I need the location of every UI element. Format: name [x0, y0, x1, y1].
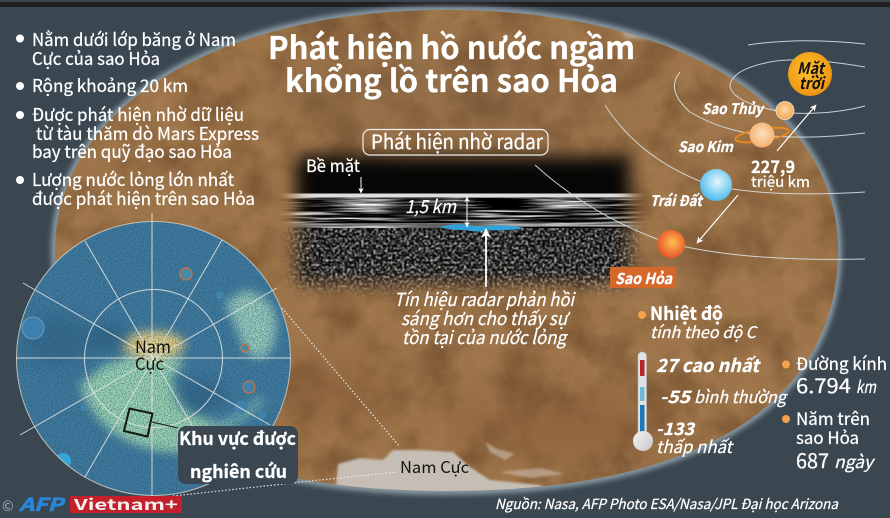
- year length stat: sao Hỏa: [796, 424, 859, 449]
- green ice region: [80, 290, 276, 452]
- title: [268, 23, 635, 101]
- temperature values: thấp nhất: [656, 433, 735, 458]
- temperature values: -55: [660, 383, 692, 408]
- key facts list: Lượng nước lỏng lớn nhất: [32, 167, 234, 192]
- pole label: Nam: [135, 333, 171, 358]
- sun: trời: [799, 70, 826, 94]
- radar image panel: [282, 142, 644, 298]
- planet Earth: Trái Đất: [650, 190, 704, 211]
- dotted zoom lines: [173, 308, 400, 496]
- orbit lines: [535, 41, 865, 259]
- map grid: [16, 213, 291, 505]
- distance label: 227,9: [751, 153, 795, 178]
- year length stat: Năm trên: [796, 405, 870, 430]
- key facts list: từ tàu thăm dò Mars Express: [36, 121, 259, 146]
- temperature values: 27 cao nhất: [656, 352, 761, 378]
- year length stat: [782, 405, 875, 474]
- planet Venus: Sao Kim: [678, 136, 734, 157]
- temperature heading: tính theo độ C: [650, 319, 758, 343]
- south polar ice cap: [335, 448, 544, 491]
- diameter stat: [782, 350, 887, 399]
- callout: study area: nghiên cứu: [190, 458, 287, 484]
- logos: ©: [2, 496, 14, 516]
- key facts list: Cực của sao Hỏa: [32, 46, 160, 71]
- yellow centre: [121, 331, 185, 359]
- year length stat: ngày: [834, 448, 875, 473]
- temperature values: bình thường: [694, 384, 789, 408]
- temperature heading: [638, 300, 758, 343]
- planet Mercury: Sao Thủy: [702, 98, 765, 119]
- key facts list: được phát hiện trên sao Hỏa: [32, 186, 255, 211]
- distance label: [751, 153, 810, 192]
- diameter stat: Đường kính: [796, 350, 887, 375]
- key facts list: Rộng khoảng 20 km: [32, 73, 188, 98]
- key facts list: [16, 27, 259, 211]
- Mars label: Sao Hỏa: [615, 268, 673, 289]
- year length stat: 687: [796, 445, 829, 474]
- logos: AFP: [18, 491, 67, 517]
- planet Mars marker: [657, 230, 685, 258]
- callout: study area: Khu vực được: [179, 425, 296, 451]
- icon: thermometer: [633, 352, 653, 451]
- radar caption: tồn tại của nước lỏng: [402, 324, 569, 350]
- key facts list: Được phát hiện nhờ dữ liệu: [32, 102, 244, 127]
- planet Earth: [650, 169, 732, 211]
- planet Mercury: [702, 98, 794, 120]
- radar caption: sáng hơn cho thấy sự: [401, 305, 571, 331]
- key facts list: bay trên quỹ đạo sao Hỏa: [32, 139, 232, 164]
- top dark strip: [0, 2, 890, 7]
- temperature heading: Nhiệt độ: [650, 300, 723, 326]
- title: Phát hiện hồ nước ngầm: [268, 23, 635, 68]
- south pole map disc: Cực: [135, 350, 164, 375]
- planet Venus: [678, 122, 790, 157]
- radar caption: [394, 286, 576, 350]
- arrow: depth: [466, 197, 468, 227]
- key facts list: Nằm dưới lớp băng ở Nam: [32, 27, 236, 52]
- south pole map disc: [16, 213, 292, 505]
- water lake on radar: [440, 224, 525, 232]
- arrow: Mars to Sun distance: [777, 105, 816, 151]
- radar title box: Phát hiện nhờ radar: [371, 126, 543, 155]
- south pole label on globe: Nam Cực: [400, 454, 469, 478]
- depth label: 1,5 km: [405, 193, 457, 219]
- title: khổng lồ trên sao Hỏa: [285, 56, 618, 101]
- diameter stat: km: [856, 373, 877, 398]
- craters: [22, 317, 44, 339]
- arrow: surface: [360, 177, 362, 193]
- surface label: Bề mặt: [306, 152, 361, 177]
- source line: Nguồn: Nasa, AFP Photo ESA/Nasa/JPL Đại học Arizona: [495, 494, 839, 514]
- arrow: Earth to Mars: [697, 195, 738, 243]
- diameter stat: 6.794: [796, 370, 851, 399]
- temperature values: -133: [656, 415, 696, 440]
- temperature values: [656, 352, 789, 458]
- logos: [2, 491, 182, 517]
- arrow: radar signal: [485, 229, 487, 287]
- distance label: triệu km: [751, 171, 810, 192]
- callout: study area: [178, 425, 298, 484]
- study area square and leader: [124, 408, 178, 436]
- dark patches: [86, 325, 130, 351]
- radar caption: Tín hiệu radar phản hồi: [394, 286, 576, 312]
- logos: Vietnam+: [73, 494, 178, 515]
- sun: Mặt: [797, 55, 826, 79]
- sun: [788, 52, 832, 96]
